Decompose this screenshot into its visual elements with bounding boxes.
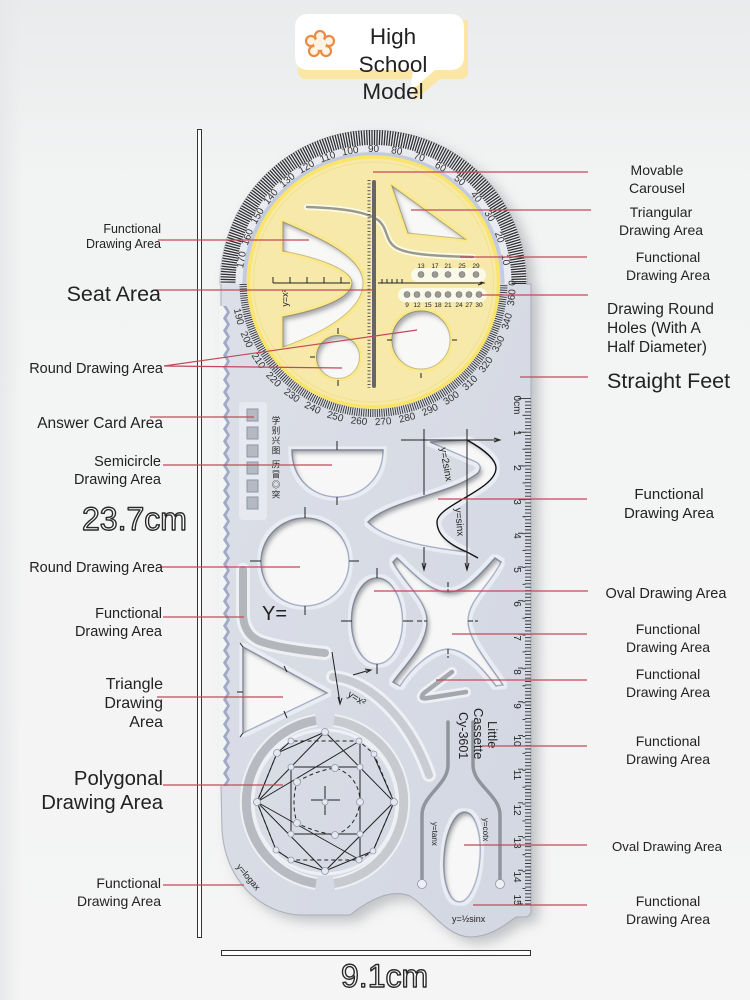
lower pill of holes — [398, 288, 487, 309]
product name — [456, 708, 500, 759]
callout: High School Model — [295, 14, 468, 104]
label: functional 6: Drawing Area — [626, 911, 710, 927]
label y=x squared: y=x² — [345, 689, 368, 709]
degree numbers 10 to 170: 30 — [482, 209, 497, 224]
protractor scale: lower half: 280 — [398, 411, 417, 426]
movable carousel disc — [248, 157, 498, 407]
degree numbers 10 to 170 — [235, 144, 511, 269]
protractor scale: lower half: 0 — [508, 280, 518, 286]
centre crosshair — [311, 786, 340, 815]
label: functional 4: Drawing Area — [626, 684, 710, 700]
centimetre numbers: 15 — [511, 894, 522, 906]
protractor scale: lower half: 340 — [500, 311, 515, 331]
parabola y=x^2 slot — [332, 652, 429, 775]
lower oval hole — [441, 811, 483, 903]
label: functional 2: Functional — [634, 486, 704, 503]
product name: Cassette — [471, 708, 486, 759]
right labels — [606, 162, 730, 927]
protractor scale: lower half: 320 — [477, 355, 496, 375]
label: triangle drawing area: Drawing — [104, 695, 163, 712]
width bracket — [222, 950, 530, 956]
label: oval drawing area: Oval Drawing Area — [606, 586, 727, 602]
sine curve and axes — [437, 440, 496, 558]
product name: Little — [485, 721, 500, 748]
centimetre numbers: 13 — [511, 837, 522, 849]
vertical slot with scale — [369, 180, 376, 388]
lower pill of holes: 24 — [455, 302, 463, 309]
degree numbers 10 to 170: 80 — [390, 145, 404, 158]
polygonal drawing area — [246, 720, 404, 884]
lower pill of holes: 12 — [413, 302, 421, 309]
dashed heptagon — [257, 741, 394, 860]
centimetre numbers: 3 — [511, 499, 522, 505]
protractor scale: lower half: 330 — [490, 334, 508, 354]
label: movable carousel: Carousel — [629, 180, 685, 196]
callout text: Model — [362, 79, 424, 104]
protractor scale: lower half: 230 — [282, 387, 302, 405]
degree numbers 10 to 170: 10 — [499, 253, 511, 267]
sine function hole — [368, 429, 500, 570]
degree numbers 10 to 170: 120 — [297, 158, 317, 176]
large round hole — [250, 507, 359, 615]
horizontal axis right arrow — [378, 279, 484, 285]
label: round holes: Half Diameter) — [607, 339, 707, 356]
degree numbers 10 to 170: 100 — [341, 145, 360, 158]
protractor scale: lower half: 300 — [442, 389, 462, 408]
degree numbers 10 to 170: 160 — [240, 227, 256, 247]
label: functional 4: Functional — [636, 666, 700, 682]
lower pill of holes: 30 — [475, 302, 483, 309]
curve labels — [234, 818, 490, 924]
label: functional 6: Functional — [636, 893, 700, 909]
label: semicircle drawing area: Drawing Area — [74, 472, 162, 488]
centimetre numbers: 9 — [511, 703, 522, 709]
label: functional 5: Drawing Area — [626, 751, 710, 767]
label: seat area: Seat Area — [67, 282, 161, 306]
protractor scale: lower half: 360 — [506, 288, 519, 306]
centimetre numbers: 7 — [511, 635, 522, 641]
centimetre numbers: 5 — [511, 567, 522, 573]
curve labels: y=cotx — [481, 818, 490, 841]
centimetre ruler — [511, 396, 528, 906]
label: functional drawing area top: Functional — [103, 222, 161, 236]
semicircle hole — [292, 441, 383, 505]
cot slot — [473, 722, 500, 883]
label: functional 1: Drawing Area — [626, 267, 710, 283]
label: functional 3: Drawing Area — [626, 639, 710, 655]
triangle hole — [237, 643, 327, 737]
degree numbers 10 to 170: 150 — [249, 206, 267, 226]
red leader lines — [150, 172, 591, 905]
label: semicircle drawing area: Semicircle — [94, 454, 161, 470]
degree numbers 10 to 170: 130 — [278, 171, 298, 190]
dimension 9.1cm: 9.1cm — [341, 958, 428, 994]
centimetre numbers: 12 — [511, 804, 522, 816]
label: triangle drawing area: Triangle — [106, 676, 163, 693]
icon: orange flower — [306, 31, 334, 56]
label: straight feet: Straight Feet — [607, 369, 730, 393]
degree numbers 10 to 170: 60 — [433, 160, 448, 175]
label Y=: Y= — [262, 603, 287, 625]
tan slot — [422, 722, 448, 883]
label: functional 5: Functional — [636, 733, 700, 749]
protractor scale: lower half: 210 — [249, 351, 267, 371]
curve labels: y=½sinx — [452, 914, 486, 924]
lower pill of holes: 21 — [444, 302, 452, 309]
label: round drawing area 2: Round Drawing Area — [29, 560, 164, 576]
upper pill of holes: 21 — [444, 263, 452, 270]
protractor scale: lower half: 250 — [326, 410, 345, 425]
centimetre numbers: 8 — [511, 669, 522, 675]
centimetre numbers: 4 — [511, 533, 522, 539]
parabola hole — [283, 222, 363, 347]
label: functional drawing area bottom: Functional — [96, 875, 161, 891]
degree numbers 10 to 170: 110 — [318, 150, 338, 165]
functional slot L inner — [243, 570, 325, 653]
protractor scale: lower half: 260 — [350, 415, 368, 428]
curve labels: y=logax — [234, 862, 263, 893]
label: triangular drawing area: Triangular — [630, 204, 693, 220]
protractor scale: lower half: 240 — [302, 400, 323, 417]
protractor scale: lower half: 190 — [231, 307, 246, 327]
degree numbers 10 to 170: 140 — [262, 187, 281, 207]
label: movable carousel: Movable — [631, 162, 684, 178]
outer ring slots — [246, 720, 404, 884]
centimetre numbers: 6 — [511, 601, 522, 607]
upper pill of holes: 25 — [458, 263, 466, 270]
V slot — [422, 672, 466, 698]
left labels — [29, 222, 164, 909]
product name: Cy-3601 — [456, 712, 470, 759]
label: answer card area: Answer Card Area — [37, 415, 163, 432]
label: functional drawing area: Functional — [95, 606, 162, 622]
triangular hole — [392, 186, 465, 239]
label y=sinx: y=sinx — [452, 507, 465, 537]
label y=x squared: y=x² — [280, 289, 290, 307]
functional slot L shape — [243, 570, 325, 653]
degree numbers 10 to 170: 170 — [235, 250, 249, 269]
centimetre numbers: 11 — [511, 770, 522, 781]
protractor scale: lower half — [234, 280, 516, 426]
upper pill of holes: 13 — [417, 263, 425, 270]
lower pill of holes: 27 — [465, 302, 473, 309]
degree numbers 10 to 170: 70 — [412, 150, 427, 165]
upper pill of holes: 17 — [431, 263, 439, 270]
label: polygonal drawing area: Polygonal — [74, 768, 163, 790]
squares and star lines — [257, 732, 394, 871]
degree numbers 10 to 170: 20 — [492, 230, 506, 245]
label: functional drawing area: Drawing Area — [75, 624, 163, 640]
large round hole — [392, 311, 450, 369]
protractor scale: lower half: 200 — [238, 330, 255, 350]
hyperbola X hole — [393, 558, 503, 686]
centimetre numbers — [511, 396, 522, 906]
curve labels: y=tanx — [430, 822, 439, 846]
vertex holes — [254, 728, 398, 874]
centimetre numbers: 14 — [511, 871, 522, 883]
upper pill of holes: 29 — [472, 263, 480, 270]
upper pill of holes — [411, 263, 486, 282]
slot end holes — [418, 880, 504, 888]
ruler body — [220, 130, 531, 937]
protractor scale: lower half: 310 — [461, 373, 481, 393]
label: triangular drawing area: Drawing Area — [619, 222, 703, 238]
centimetre numbers: 1 — [511, 430, 522, 436]
oval hole — [341, 568, 413, 674]
centimetre numbers: 2 — [511, 465, 522, 471]
lower pill of holes: 18 — [434, 302, 442, 309]
label: triangle drawing area: Area — [129, 714, 163, 731]
centimetre numbers: 10 — [511, 735, 522, 747]
degree numbers 10 to 170: 90 — [368, 144, 379, 155]
dashed inner rounded shape — [294, 768, 360, 835]
lower pill of holes: 15 — [424, 302, 432, 309]
horizontal axis left — [273, 277, 350, 283]
callout text: High — [370, 24, 416, 49]
hole ticks — [310, 328, 457, 386]
label: round holes: Drawing Round — [607, 301, 714, 318]
label: polygonal drawing area: Drawing Area — [41, 792, 164, 814]
label: functional 3: Functional — [636, 621, 700, 637]
label: functional drawing area top: Drawing Area — [86, 237, 161, 251]
callout text: School — [359, 52, 427, 77]
label: oval drawing area 2: Oval Drawing Area — [612, 839, 723, 854]
answer card area — [239, 402, 281, 520]
degree numbers 10 to 170: 50 — [452, 173, 467, 189]
protractor scale: lower half: 270 — [375, 416, 392, 428]
curved slot — [307, 207, 473, 257]
label: round holes: Holes (With A — [607, 320, 702, 337]
label y=2sinx: y=2sinx — [437, 447, 454, 482]
protractor scale: lower half: 220 — [263, 370, 283, 390]
protractor scale: upper half — [220, 130, 527, 284]
dimension 23.7cm: 23.7cm — [82, 501, 187, 537]
centimetre numbers: 0cm — [511, 396, 522, 414]
lower pill of holes: 9 — [405, 302, 409, 309]
degree numbers 10 to 170: 40 — [468, 189, 484, 205]
sawtooth edge — [219, 306, 230, 786]
label: round drawing area: Round Drawing Area — [29, 361, 164, 377]
answer card area: 学别兴图 历冒◎突 — [271, 415, 281, 500]
label: functional 2: Drawing Area — [624, 505, 715, 522]
small round hole — [316, 336, 360, 378]
height bracket — [198, 130, 202, 938]
protractor scale: lower half: 290 — [420, 402, 440, 419]
label: functional drawing area bottom: Drawing Area — [77, 893, 161, 909]
label: functional 1: Functional — [636, 249, 700, 265]
